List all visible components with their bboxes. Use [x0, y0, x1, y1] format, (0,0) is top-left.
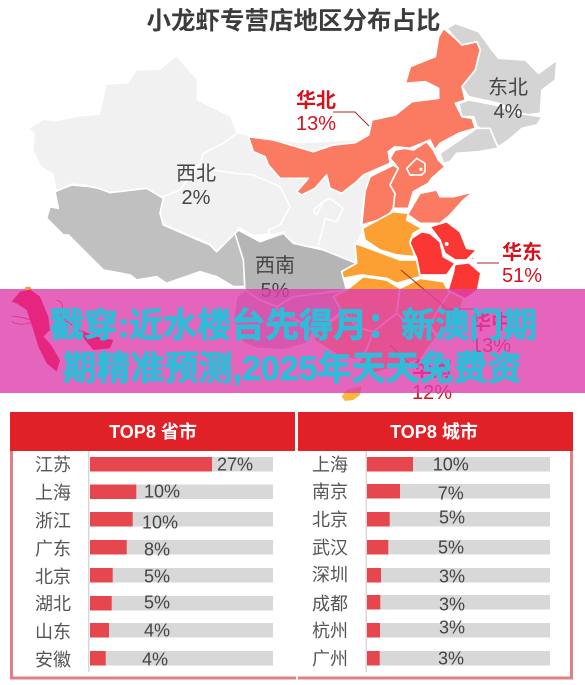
label: central: 13%: [471, 335, 511, 357]
region: southwest: [47, 185, 357, 350]
region: northeast: [440, 23, 557, 163]
panel: top 8 cities: 3%: [438, 648, 464, 668]
panel frame: [298, 451, 572, 678]
rows: 安徽: [35, 650, 71, 670]
rows: 江苏: [35, 455, 71, 475]
title: 小龙虾专营店地区分布占比: [146, 7, 440, 35]
rows: 山东: [35, 622, 71, 642]
panel: top 8 provinces: 5%: [144, 592, 170, 612]
panel: top 8 provinces: 10%: [144, 482, 180, 502]
region: northwest: [30, 57, 370, 263]
label: east: 51%: [502, 265, 542, 287]
rows: 南京: [312, 482, 348, 502]
rows: 上海: [35, 483, 71, 503]
label: southwest: [255, 254, 295, 302]
rows: 上海: [312, 455, 348, 475]
rows: 杭州: [312, 621, 348, 641]
label: northwest: 西北: [176, 162, 216, 185]
panel: top 8 cities: 3%: [439, 566, 465, 586]
leader lines: [333, 112, 499, 367]
panel: top 8 cities: 3%: [439, 618, 465, 638]
panel: top 8 provinces: 10%: [142, 512, 178, 532]
rows: 浙江: [35, 511, 71, 531]
panel: top 8 provinces: 4%: [144, 620, 170, 640]
label: central: [471, 311, 511, 357]
panel: top 8 provinces: 27%: [217, 454, 253, 474]
rows: 广东: [35, 539, 71, 559]
rows: 北京: [35, 567, 71, 587]
label: south: 12%: [412, 382, 452, 404]
label: northeast: [488, 76, 528, 123]
label: east: 华东: [502, 240, 542, 264]
rows: 广州: [312, 649, 348, 669]
rows: 湖北: [35, 594, 71, 614]
rows: [35, 455, 71, 670]
label: central: 华中: [471, 311, 511, 334]
rows: 北京: [312, 510, 348, 530]
label: south: 华南: [412, 358, 452, 381]
label: east: [502, 240, 542, 287]
panel: top 8 cities: 5%: [439, 508, 465, 528]
panel: top 8 provinces: 8%: [144, 540, 170, 560]
label: northeast: 4%: [494, 101, 523, 123]
header: [298, 412, 573, 451]
banner background: [0, 289, 585, 393]
region: east: [410, 222, 477, 275]
panel frame: [12, 451, 296, 678]
panel: top 8 cities: 3%: [439, 594, 465, 614]
panel: top 8 provinces: [10, 412, 296, 678]
panel: top 8 provinces: 4%: [142, 650, 168, 670]
region: north: [248, 28, 480, 195]
panel: top 8 cities: [298, 412, 573, 678]
panel: top 8 cities: 7%: [438, 484, 464, 504]
label: south: [412, 358, 452, 404]
map of China regions: [30, 23, 557, 401]
rows: [312, 455, 348, 669]
label: north: 13%: [296, 113, 336, 135]
banner headline: 期精准预测,2025年天天免费资: [62, 350, 522, 388]
rows: 成都: [312, 594, 348, 614]
panel: top 8 cities: 10%: [433, 454, 469, 474]
header: [10, 412, 295, 451]
banner headline: 戳穿:近水楼台先得月：新澳门期: [50, 307, 537, 345]
label: southwest: 5%: [261, 280, 290, 302]
rows: 武汉: [312, 538, 348, 558]
label: north: [296, 89, 336, 135]
icon: lobster: [12, 287, 113, 372]
panel: top 8 cities: TOP8 城市: [390, 421, 478, 442]
panel: top 8 provinces: TOP8 省市: [109, 421, 197, 442]
banner headline: [50, 307, 537, 388]
region: south-central: [313, 243, 463, 401]
label: northwest: [176, 162, 216, 209]
panel: top 8 provinces: 5%: [144, 566, 170, 586]
label: northeast: 东北: [488, 76, 528, 99]
label: southwest: 西南: [255, 254, 295, 277]
panel: top 8 cities: 5%: [438, 538, 464, 558]
label: north: 华北: [296, 89, 336, 112]
rows: 深圳: [312, 565, 348, 585]
provinces of the north plain: [362, 142, 474, 257]
label: northwest: 2%: [182, 187, 211, 209]
